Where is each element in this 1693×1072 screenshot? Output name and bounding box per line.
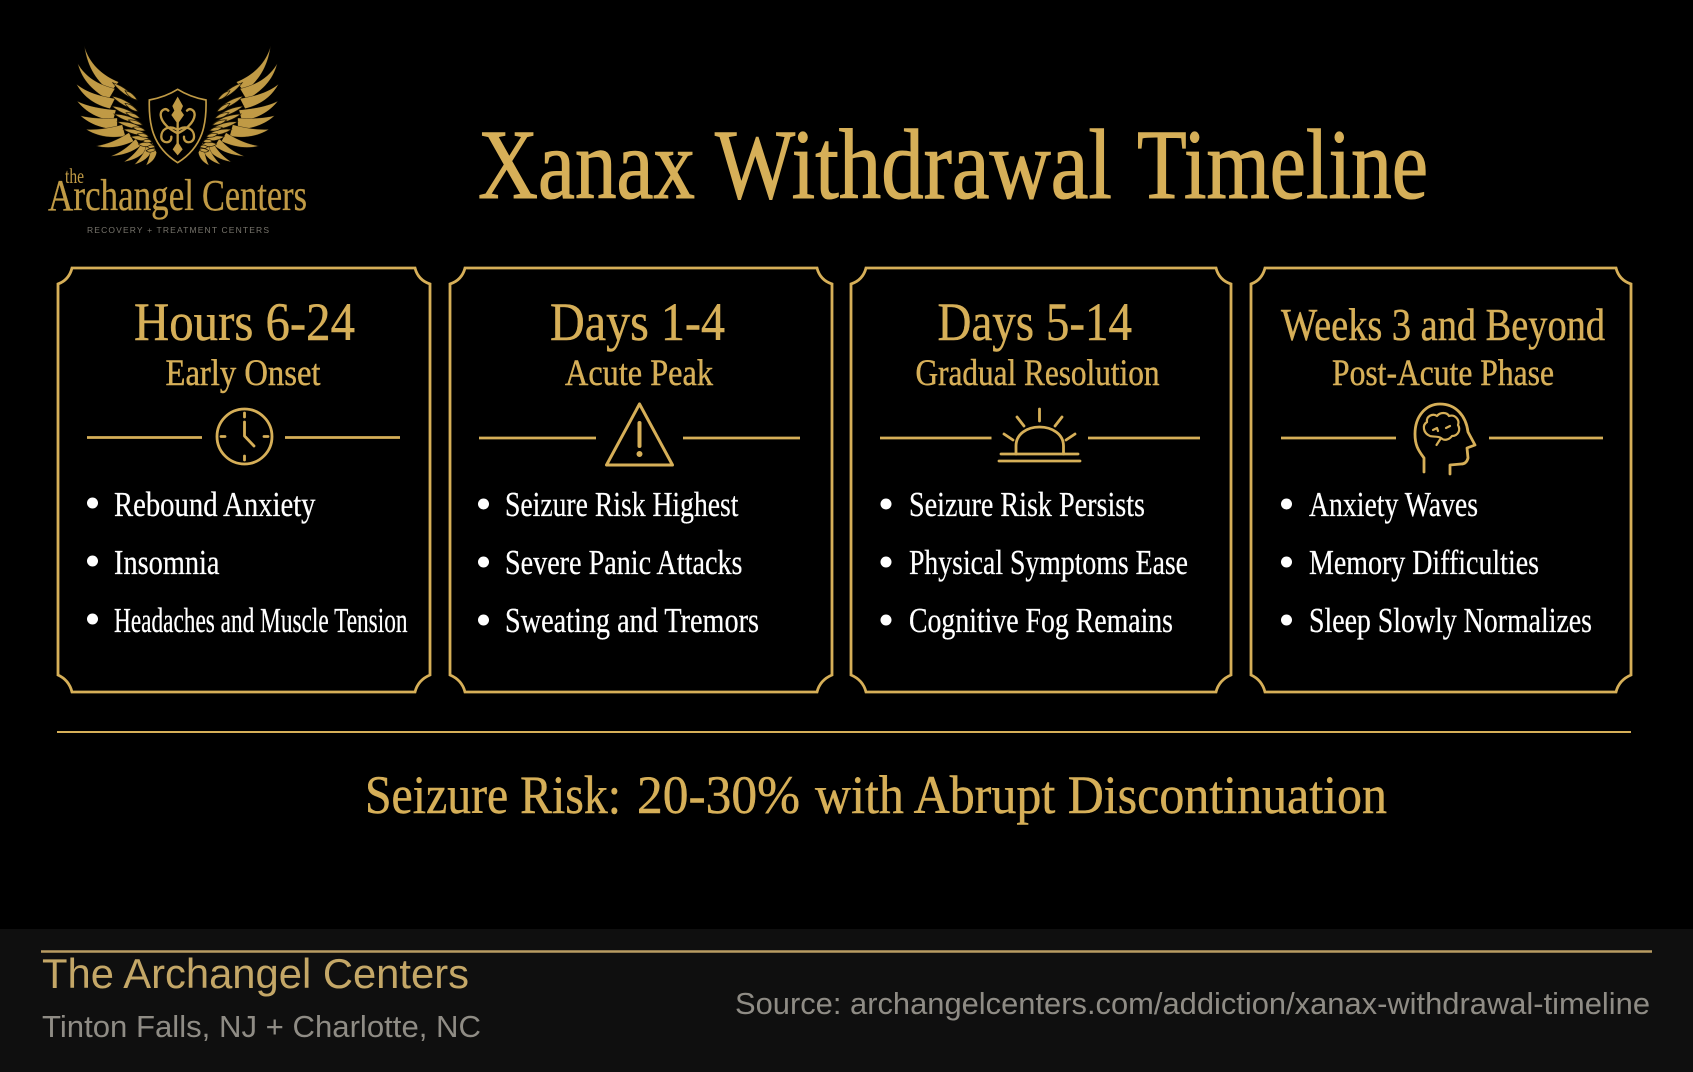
subheading: Post-Acute Phase: Post-Acute Phase	[1332, 353, 1554, 394]
heading: Hours 6-24: Hours 6-24	[134, 292, 355, 352]
icon: head with brain	[1415, 404, 1475, 474]
logo wordmark: the	[65, 164, 84, 188]
callout: seizure risk: Seizure Risk:	[365, 765, 621, 825]
icon: sunrise	[999, 409, 1080, 461]
symptom list: Memory Difficulties	[1309, 543, 1539, 582]
panel: Hours 6-24	[58, 268, 430, 692]
panel: Days 5-14	[851, 268, 1231, 692]
icon: winged shield	[76, 46, 279, 165]
symptom list: Insomnia	[114, 543, 220, 582]
callout: seizure risk: 20-30%	[637, 765, 800, 825]
callout: seizure risk: with Abrupt Discontinuation	[815, 765, 1387, 825]
symptom list	[87, 485, 408, 640]
symptom list: Physical Symptoms Ease	[909, 543, 1188, 582]
logo wordmark	[48, 164, 307, 220]
icon: warning triangle	[606, 404, 672, 465]
symptom list	[880, 485, 1188, 640]
footer locations: Tinton Falls, NJ + Charlotte, NC	[42, 1009, 481, 1044]
title: Xanax	[478, 109, 695, 220]
symptom list: Seizure Risk Highest	[505, 485, 739, 524]
title: Timeline	[1137, 109, 1428, 220]
footer	[0, 929, 1693, 1072]
logo: The Archangel Centers	[48, 46, 307, 235]
symptom list: Seizure Risk Persists	[909, 485, 1145, 524]
subheading: Gradual Resolution: Gradual Resolution	[916, 353, 1160, 394]
symptom list: Headaches and Muscle Tension	[114, 601, 408, 640]
symptom list	[1281, 485, 1592, 640]
heading: Days 5-14: Days 5-14	[938, 292, 1132, 352]
title: Withdrawal	[715, 109, 1112, 220]
symptom list: Severe Panic Attacks	[505, 543, 742, 582]
symptom list: Anxiety Waves	[1309, 485, 1478, 524]
title	[478, 109, 1428, 220]
logo wordmark: Archangel	[48, 171, 194, 220]
subheading: Acute Peak: Acute Peak	[565, 353, 713, 394]
callout: seizure risk	[365, 765, 1387, 825]
symptom list: Cognitive Fog Remains	[909, 601, 1173, 640]
subheading: Early Onset: Early Onset	[166, 353, 321, 394]
panel: Weeks 3 and Beyond	[1251, 268, 1631, 692]
footer organisation name: The Archangel Centers	[42, 950, 469, 997]
icon: clock	[217, 409, 272, 464]
symptom list: Sleep Slowly Normalizes	[1309, 601, 1592, 640]
wing coverts	[112, 83, 156, 152]
symptom list: Rebound Anxiety	[114, 485, 316, 524]
symptom list: Sweating and Tremors	[505, 601, 759, 640]
logo wordmark: Centers	[202, 171, 307, 220]
heading: Weeks 3 and Beyond: Weeks 3 and Beyond	[1281, 299, 1605, 350]
logo tagline: RECOVERY + TREATMENT CENTERS	[87, 225, 269, 235]
panel: Days 1-4	[450, 268, 832, 692]
symptom list	[478, 485, 759, 640]
footer source: Source: archangelcenters.com/addiction/xanax-withdrawal-timeline	[735, 986, 1650, 1021]
heading: Days 1-4: Days 1-4	[550, 292, 725, 352]
